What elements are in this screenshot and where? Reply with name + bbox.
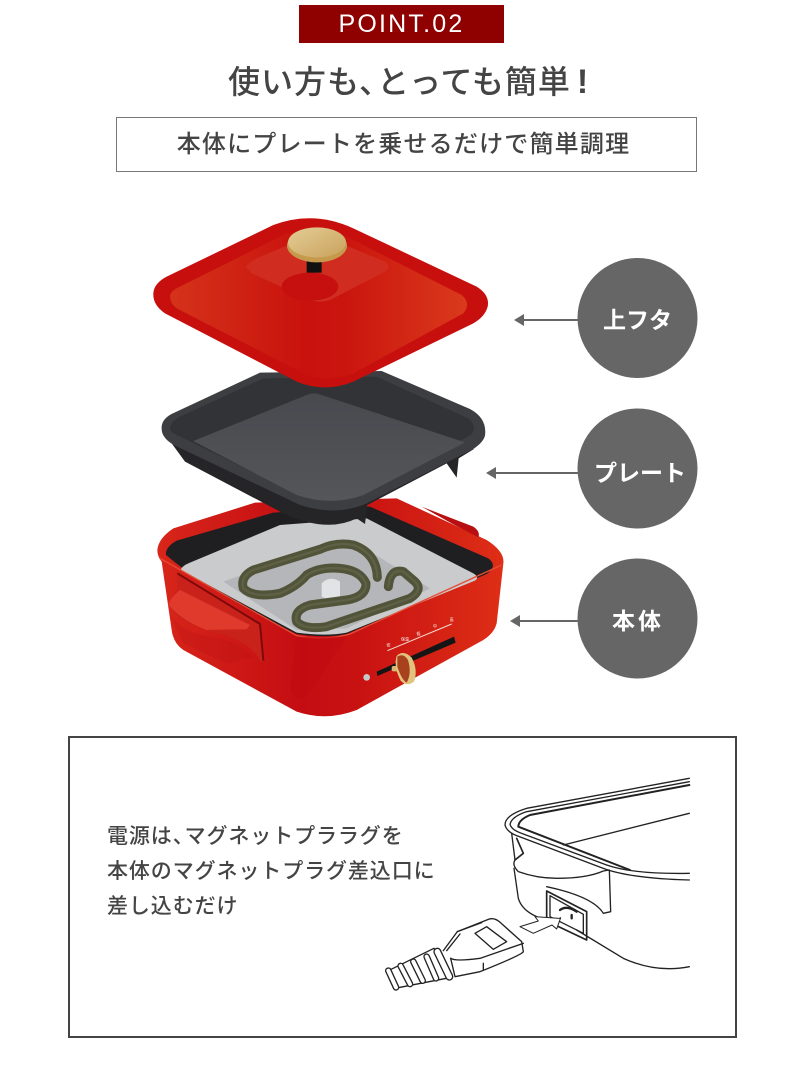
- temperature slider: [363, 616, 456, 684]
- subtitle box: 本体にプレートを乗せるだけで簡単調理: [177, 131, 630, 158]
- temperature labels: [386, 616, 454, 648]
- temperature labels: 低: [416, 630, 420, 636]
- badge: POINT.02: POINT.02: [338, 10, 464, 38]
- temperature labels: 高: [450, 616, 454, 622]
- temperature labels: 保温: [401, 636, 409, 642]
- plate underside: [172, 405, 474, 525]
- callout: plate: [486, 408, 698, 528]
- subtitle box: [116, 117, 697, 172]
- interior wall: [166, 507, 493, 636]
- plate floor: [193, 393, 465, 501]
- badge: POINT.02: [299, 5, 504, 43]
- center post: [322, 579, 340, 599]
- power socket: [547, 891, 587, 940]
- plug housing: [443, 919, 523, 977]
- body shell: [157, 498, 503, 716]
- heating coil: [243, 544, 418, 628]
- text block: power instructions: [107, 824, 436, 918]
- text block: power instructions: 電源は、マグネットプララグを: [107, 825, 404, 848]
- main body of the hot plate: [157, 498, 503, 716]
- right handle: [422, 507, 479, 537]
- interior floor: [181, 518, 477, 635]
- temperature labels: 切: [386, 642, 390, 648]
- heating tray: [223, 543, 430, 630]
- cable strain relief: [388, 948, 452, 988]
- label circle: plate: [578, 408, 698, 528]
- plate inner wall: [170, 377, 474, 501]
- lid top plateau: [246, 238, 388, 302]
- line drawing: power plug: [388, 919, 523, 988]
- rim highlight: [160, 558, 502, 638]
- line drawing: body corner and socket: [505, 778, 689, 969]
- panel: power plug frame: [69, 737, 736, 1037]
- knob reflection: [282, 273, 338, 301]
- label circle: plate: プレート: [594, 460, 686, 486]
- label circle: lid: [578, 258, 698, 378]
- text block: power instructions: 本体のマグネットプラグ差込口に: [107, 860, 436, 883]
- callout: body: [510, 558, 698, 678]
- label circle: lid: 上フタ: [603, 307, 672, 333]
- plate rim: [162, 371, 485, 510]
- lid dome: [170, 231, 467, 378]
- grill plate: [153, 218, 488, 525]
- front highlight: [290, 637, 347, 699]
- plug details: [447, 923, 523, 970]
- arrow: body: [510, 615, 578, 627]
- insertion arrow: [520, 917, 561, 933]
- text block: power instructions: 差し込むだけ: [107, 895, 238, 918]
- arrow: lid: [514, 314, 578, 326]
- label circle: body: [578, 558, 698, 678]
- body rim: [505, 778, 689, 880]
- arrow: plate: [486, 467, 578, 479]
- label circle: body: 本体: [612, 608, 664, 634]
- body side and handle: [512, 833, 689, 969]
- callout: lid: [514, 258, 698, 378]
- lid shell: [153, 218, 488, 387]
- left handle: [168, 573, 264, 663]
- temperature labels: 中: [433, 623, 437, 629]
- title: 使い方も、とっても簡単!: [228, 63, 589, 101]
- lid knob: [287, 227, 347, 273]
